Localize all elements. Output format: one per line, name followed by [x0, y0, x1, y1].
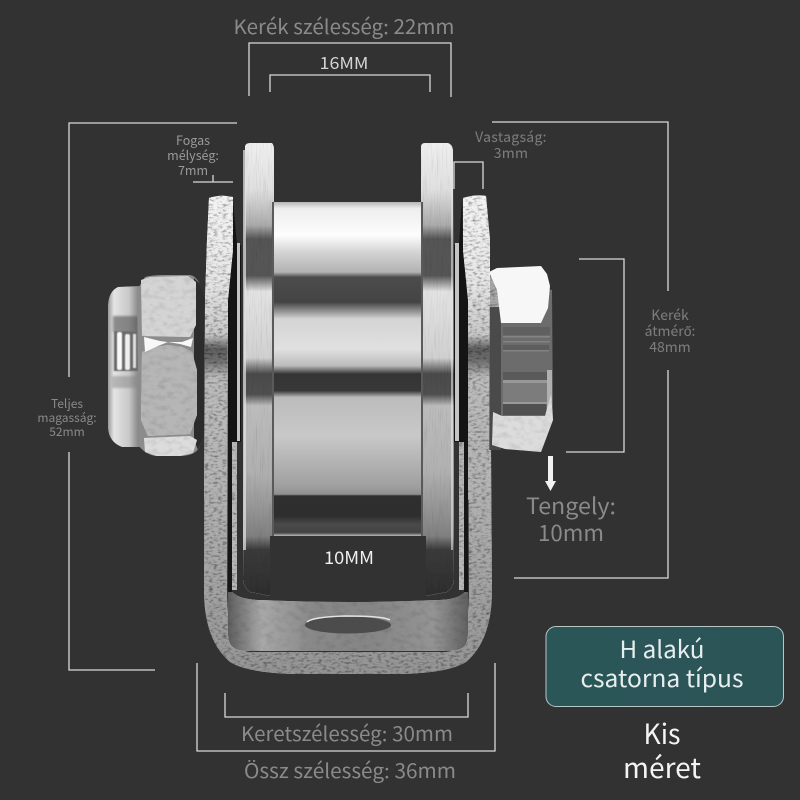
- label: wheel diameter: Kerék: [651, 305, 689, 325]
- right flange: [421, 143, 454, 596]
- drum: [273, 202, 422, 536]
- callout: channel type: csatorna típus: [580, 659, 744, 694]
- bolt side dark: [489, 305, 501, 450]
- callout: small size: Kis: [644, 713, 680, 753]
- right hex bolt: [489, 266, 553, 452]
- wheel width 22mm bracket: [249, 43, 451, 97]
- frame width bracket: [225, 693, 468, 717]
- arrow: axle: [545, 456, 556, 491]
- flange edge lines: [243, 150, 453, 550]
- label: tooth depth: Fogas: [176, 130, 210, 149]
- bracket U-plate: [204, 195, 492, 674]
- wheel outer bracket: [492, 122, 668, 578]
- label: thickness: 3mm: [494, 143, 528, 163]
- callout: small size: [623, 713, 701, 787]
- product photo: wheel and bracket: [108, 143, 553, 674]
- label: axle: Tengely:: [526, 489, 616, 521]
- label: thickness: Vastagság:: [475, 127, 547, 147]
- dark gaps between plates and flanges: [228, 200, 468, 592]
- dimension lines: [69, 43, 668, 751]
- label: tooth depth: mélység:: [167, 145, 219, 164]
- left lock nut: [108, 275, 205, 456]
- label: total height: Teljes: [51, 395, 83, 412]
- bolt grooves: [503, 327, 552, 420]
- label: axle: [526, 489, 616, 548]
- label: wheel diameter: átmérő:: [645, 321, 695, 341]
- label: total height: 52mm: [49, 423, 85, 440]
- nut shadow: [194, 278, 205, 450]
- groove 16mm bracket: [270, 75, 430, 92]
- nut lower face: [141, 345, 197, 436]
- label: wheel diameter: 48mm: [649, 337, 691, 357]
- total height bracket: [69, 123, 237, 670]
- left flange: [243, 143, 274, 596]
- nut collar: [108, 286, 142, 447]
- bracket inner floor: [228, 585, 468, 651]
- callout: small size: méret: [623, 747, 701, 787]
- bolt top face: [489, 266, 550, 323]
- label: 10MM: 10MM: [324, 545, 374, 570]
- bolt lower face: [492, 395, 553, 452]
- nut bottom face: [144, 436, 197, 456]
- tooth depth bracket: [193, 175, 233, 182]
- left plate redraw edge: [204, 196, 233, 500]
- right plate redraw edge: [463, 195, 490, 500]
- label: total width: Össz szélesség: 36mm: [244, 755, 456, 784]
- thickness bracket: [454, 162, 483, 189]
- callout: channel type: H alakú: [620, 630, 704, 665]
- wheel diameter bracket: [566, 259, 624, 452]
- label: frame width: Keretszélesség: 30mm: [241, 718, 453, 747]
- label: wheel width: Kerék szélesség: 22mm: [234, 11, 454, 40]
- nut top face: [141, 276, 196, 337]
- total width bracket: [197, 663, 495, 751]
- label: axle: 10mm: [538, 516, 604, 548]
- nut hex body: [137, 275, 205, 456]
- label: tooth depth: 7mm: [178, 160, 208, 179]
- bolt upper side: [490, 277, 500, 307]
- slot in bracket floor: [305, 616, 391, 634]
- 10mm gap cut-out: [270, 536, 426, 598]
- label: total height: magasság:: [37, 409, 97, 426]
- label: 16MM: 16MM: [320, 50, 368, 74]
- nut bright seam: [144, 337, 193, 352]
- callout: channel type: [546, 626, 784, 706]
- bolt shaded middle: [490, 275, 553, 452]
